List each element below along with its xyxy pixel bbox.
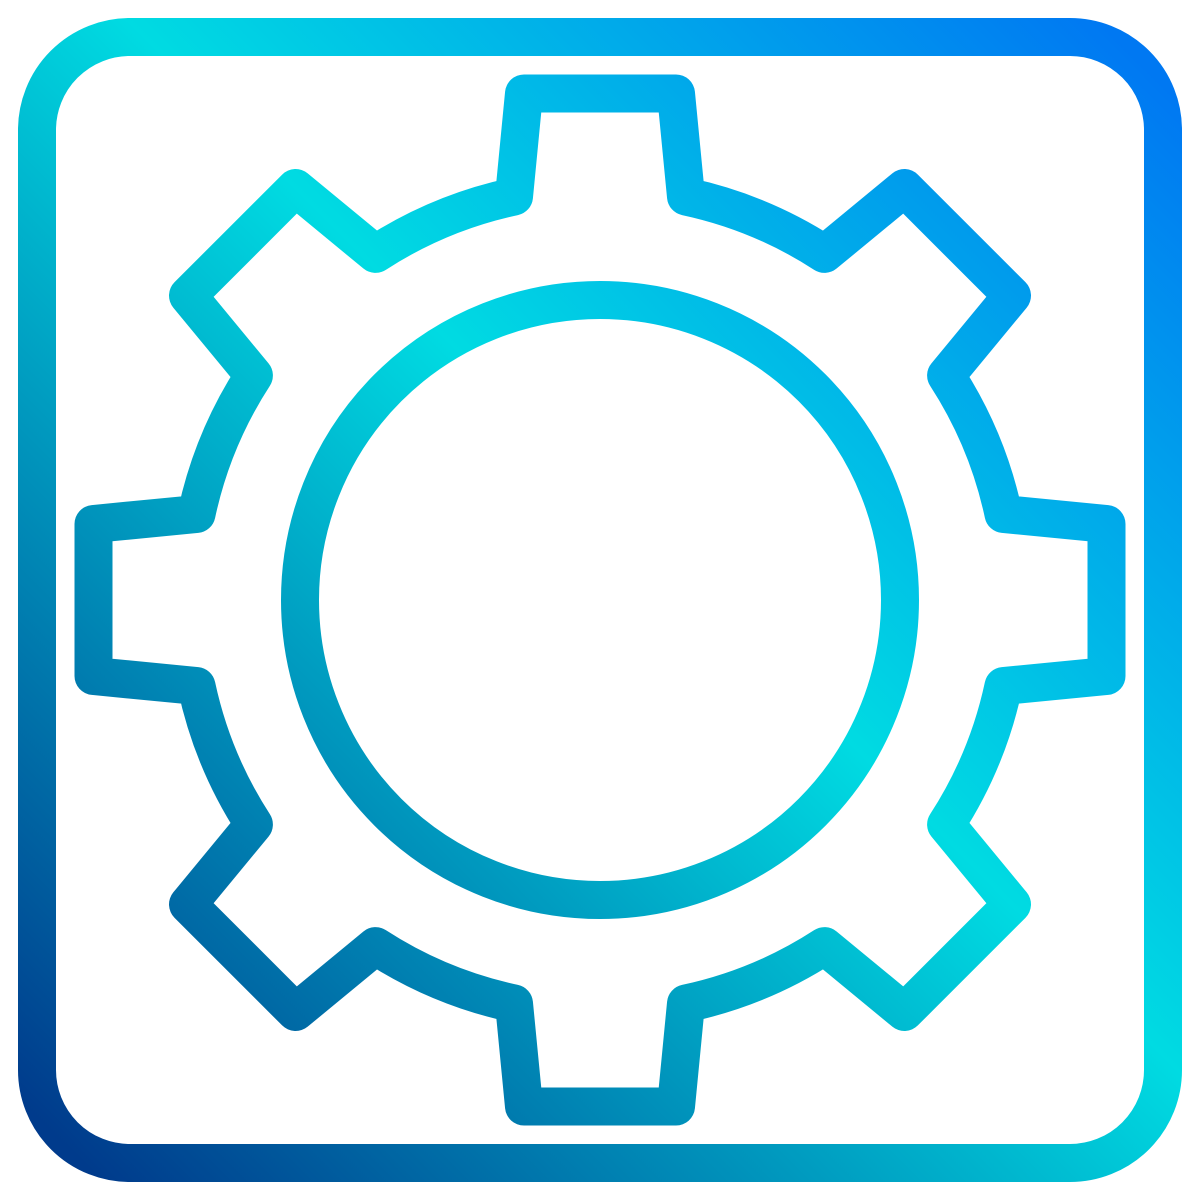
gear outline <box>94 94 1106 1106</box>
gear center circle <box>300 300 900 900</box>
